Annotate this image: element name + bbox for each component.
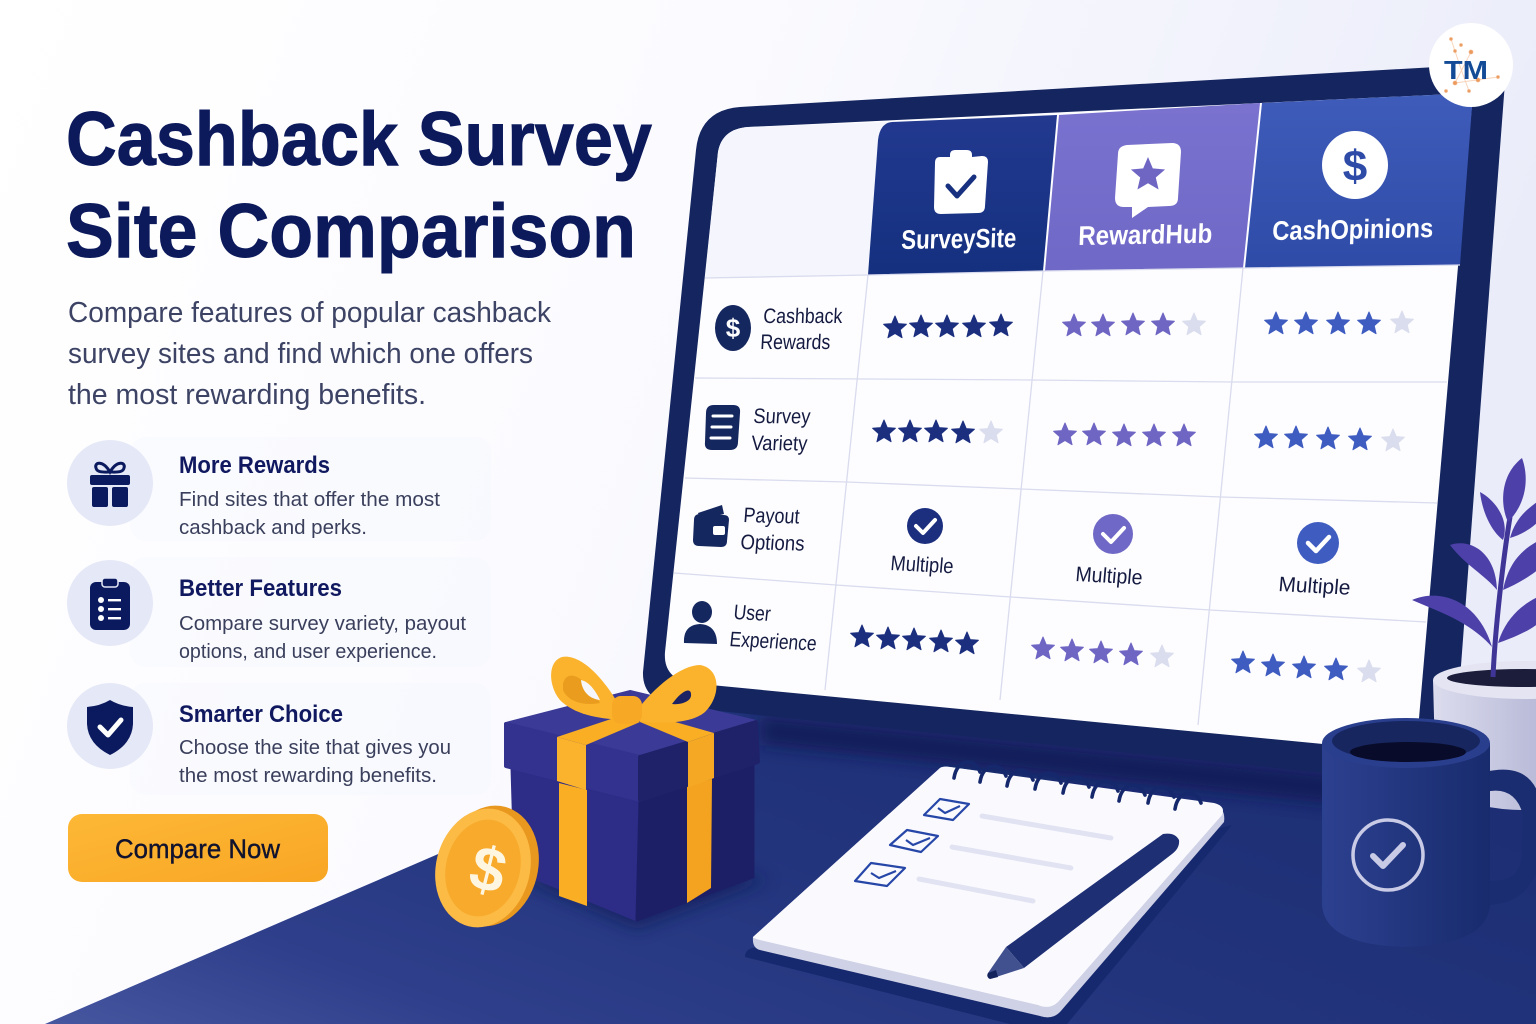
stars: CashOpinions 4 of 5	[1255, 426, 1404, 451]
mug check badge	[1353, 820, 1423, 890]
feature: Smarter Choice	[67, 683, 491, 795]
header: CashOpinions	[1245, 93, 1473, 268]
table grid lines	[674, 265, 1460, 725]
gift box	[506, 657, 770, 930]
tablet screen	[665, 93, 1473, 753]
icon: dollar: $	[726, 313, 741, 343]
intro paragraph: Compare features of popular cashback	[68, 297, 551, 329]
pot	[1433, 661, 1536, 810]
logo badge: TM	[1444, 55, 1488, 85]
icon: dollar	[715, 305, 751, 351]
heading: More Rewards	[179, 452, 330, 479]
label: Survey Variety	[751, 405, 812, 455]
heading: Smarter Choice	[179, 701, 343, 728]
coffee mug	[1322, 718, 1536, 947]
tablet shadow on desk	[760, 715, 1450, 815]
description: Compare survey variety, payout	[179, 613, 466, 635]
icon: checklist	[67, 560, 153, 646]
title: Site Comparison	[66, 189, 636, 274]
description: Choose the site that gives you	[179, 737, 451, 759]
check: SurveySite Multiple	[890, 508, 954, 578]
description: Find sites that offer the most	[179, 489, 440, 511]
icon: wallet	[693, 505, 729, 547]
description	[179, 489, 440, 539]
plant	[1412, 458, 1536, 810]
row: Payout Options	[693, 504, 1351, 600]
tablet frame	[643, 64, 1505, 785]
check: CashOpinions Multiple	[1278, 522, 1351, 600]
box lid	[506, 692, 758, 800]
tablet comparison table	[643, 64, 1505, 785]
logo badge	[1429, 23, 1513, 107]
description: cashback and perks.	[179, 517, 367, 539]
icon: shield	[67, 683, 153, 769]
row: Cashback Rewards	[715, 305, 1413, 354]
icon: dollar circle: $	[1343, 142, 1367, 191]
label: CashOpinions: CashOpinions	[1272, 213, 1434, 246]
top page	[753, 767, 1223, 1007]
stars: RewardHub 4 of 5	[1032, 637, 1173, 667]
row: Survey Variety	[705, 405, 1404, 455]
label: Cashback Rewards: Rewards	[760, 331, 831, 354]
title	[66, 97, 652, 274]
page stack	[753, 767, 1224, 1017]
button: Compare Now: Compare Now	[115, 834, 280, 864]
heading: Better Features	[179, 575, 342, 602]
ribbon bow	[551, 657, 716, 724]
stars: RewardHub 4 of 5	[1063, 313, 1205, 336]
stars: SurveySite 5 of 5	[884, 314, 1012, 338]
body	[1322, 743, 1490, 947]
feature: More Rewards	[67, 437, 491, 541]
rim	[1322, 718, 1490, 768]
desk surface	[45, 700, 1536, 1024]
icon: gift	[67, 440, 153, 526]
intro paragraph	[68, 297, 551, 411]
stars: SurveySite 5 of 5	[851, 625, 978, 654]
checkboxes	[855, 799, 969, 886]
intro paragraph: the most rewarding benefits.	[68, 379, 426, 411]
description: the most rewarding benefits.	[179, 765, 437, 787]
label: Cashback Rewards	[760, 305, 843, 354]
box body	[512, 762, 753, 920]
label: User Experience: User	[732, 601, 772, 626]
check: SurveySite Multiple: Multiple	[890, 552, 954, 578]
coin	[423, 795, 551, 938]
header: SurveySite	[868, 115, 1057, 275]
label: User Experience	[728, 601, 818, 656]
check: RewardHub Multiple: Multiple	[1075, 563, 1143, 589]
description	[179, 613, 466, 663]
coffee	[1350, 742, 1466, 762]
stars: RewardHub 5 of 5	[1054, 423, 1195, 446]
title: Cashback Survey	[66, 97, 652, 182]
pen	[987, 834, 1179, 979]
button: Compare Now	[68, 814, 328, 882]
leaves	[1412, 458, 1536, 647]
stars: CashOpinions 4 of 5	[1232, 651, 1380, 682]
icon: user	[684, 601, 717, 644]
feature: Better Features	[67, 557, 491, 667]
check: CashOpinions Multiple: Multiple	[1278, 573, 1351, 600]
label: Survey Variety: Variety	[751, 432, 809, 455]
header: RewardHub	[1045, 103, 1260, 271]
label: RewardHub: RewardHub	[1078, 219, 1213, 251]
label: Payout Options: Payout	[743, 504, 801, 528]
handle	[1485, 770, 1536, 905]
stars: SurveySite 4 of 5	[873, 420, 1002, 443]
label: Payout Options	[740, 504, 805, 556]
intro paragraph: survey sites and find which one offers	[68, 338, 533, 370]
label: Cashback Rewards: Cashback	[763, 305, 843, 328]
empty header cell	[705, 122, 890, 278]
icon: list	[705, 405, 740, 450]
stars: CashOpinions 4 of 5	[1265, 311, 1413, 334]
row: User Experience	[684, 601, 1380, 682]
label: User Experience: Experience	[728, 628, 818, 656]
coin: $	[463, 832, 513, 908]
shadow	[520, 850, 770, 930]
stem	[1493, 517, 1510, 677]
label: Payout Options: Options	[740, 531, 805, 556]
spiral rings	[954, 762, 1201, 809]
check: RewardHub Multiple	[1075, 514, 1143, 589]
description	[179, 737, 451, 787]
label: Survey Variety: Survey	[753, 405, 812, 428]
notepad base	[745, 825, 1232, 1024]
notepad	[745, 762, 1232, 1024]
checklist lines	[919, 816, 1111, 901]
icon: dollar circle	[1322, 131, 1388, 199]
icon: speech bubble star	[1115, 143, 1181, 218]
icon: clipboard check	[934, 150, 988, 214]
label: SurveySite: SurveySite	[901, 223, 1017, 255]
description: options, and user experience.	[179, 641, 437, 663]
